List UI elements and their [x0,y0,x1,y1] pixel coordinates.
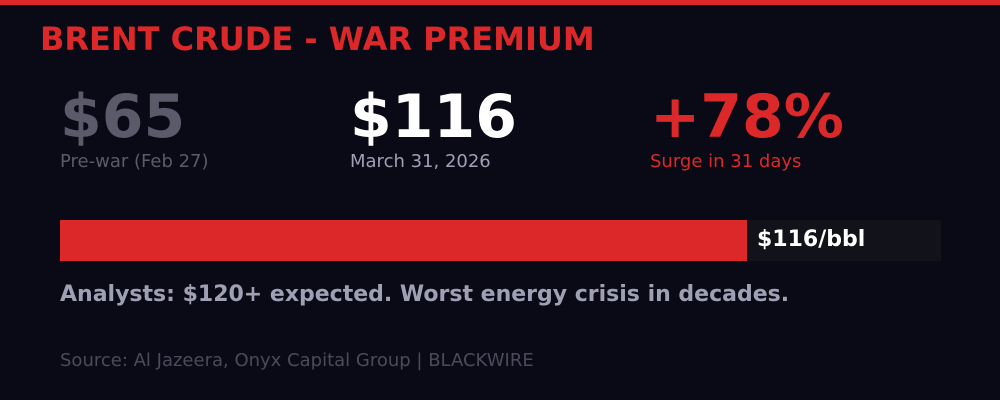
stat: current: March 31, 2026 [350,151,491,172]
top accent bar [0,0,1000,5]
price bar [60,220,941,261]
title: BRENT CRUDE - WAR PREMIUM [40,20,595,58]
stat: pre-war [60,82,209,172]
source: Source: Al Jazeera, Onyx Capital Group | BLACKWIRE [60,350,534,371]
stat: surge: +78% [650,82,844,152]
stat: current: $116 [350,82,517,152]
price bar: $116/bbl [757,227,865,252]
stat: pre-war: $65 [60,82,185,152]
analyst note: Analysts: $120+ expected. Worst energy crisis in decades. [60,282,789,307]
stat: pre-war: Pre-war (Feb 27) [60,151,209,172]
stat: surge: Surge in 31 days [650,151,801,172]
